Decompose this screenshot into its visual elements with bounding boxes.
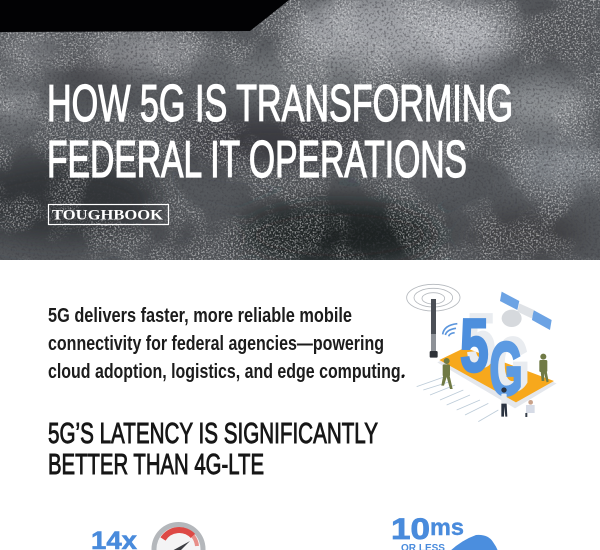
5G lettering: G bbox=[496, 322, 529, 406]
10ms label: 10 bbox=[391, 513, 430, 546]
hero banner: concrete texture background bbox=[0, 0, 600, 270]
officer figure bbox=[501, 387, 507, 417]
seated technician bbox=[525, 400, 535, 417]
5G lettering: 5 bbox=[467, 298, 495, 382]
5G lettering: 5 bbox=[460, 304, 489, 388]
intro text block bbox=[48, 305, 405, 383]
section heading: 5G’S LATENCY IS SIGNIFICANTLY bbox=[48, 418, 378, 450]
Toughbook logo bbox=[48, 204, 168, 224]
soldier right bbox=[539, 354, 549, 382]
stat: 10ms or less: ms bbox=[430, 514, 464, 540]
icon: speed gauge bbox=[152, 522, 206, 550]
5G lettering bbox=[460, 298, 529, 411]
section heading: BETTER THAN 4G-LTE bbox=[48, 449, 264, 481]
circuit lines bbox=[417, 377, 498, 422]
satellite bbox=[500, 292, 552, 330]
antenna mast bbox=[430, 299, 438, 358]
small dot bbox=[402, 374, 405, 377]
white content panel bbox=[0, 260, 600, 550]
title bbox=[47, 75, 513, 189]
illustration: 5G isometric scene bbox=[402, 284, 557, 422]
black corner tab bbox=[0, 0, 289, 32]
intro text block: connectivity for federal agencies—powering bbox=[48, 333, 384, 355]
icon: blue shape bbox=[450, 535, 498, 550]
wifi icon bbox=[443, 324, 457, 336]
soldier left bbox=[441, 358, 453, 389]
stat: 14x faster bbox=[91, 522, 206, 550]
orange platform bbox=[439, 348, 554, 402]
platform base bbox=[437, 349, 557, 408]
Toughbook logo: TOUGHBOOK bbox=[52, 208, 163, 224]
stat: 10ms or less bbox=[392, 518, 498, 550]
intro text block: cloud adoption, logistics, and edge computing. bbox=[48, 361, 405, 383]
5G lettering: G bbox=[489, 327, 523, 411]
antenna rings bbox=[407, 284, 460, 311]
intro text block: 5G delivers faster, more reliable mobile bbox=[48, 305, 352, 327]
section heading bbox=[48, 418, 378, 481]
